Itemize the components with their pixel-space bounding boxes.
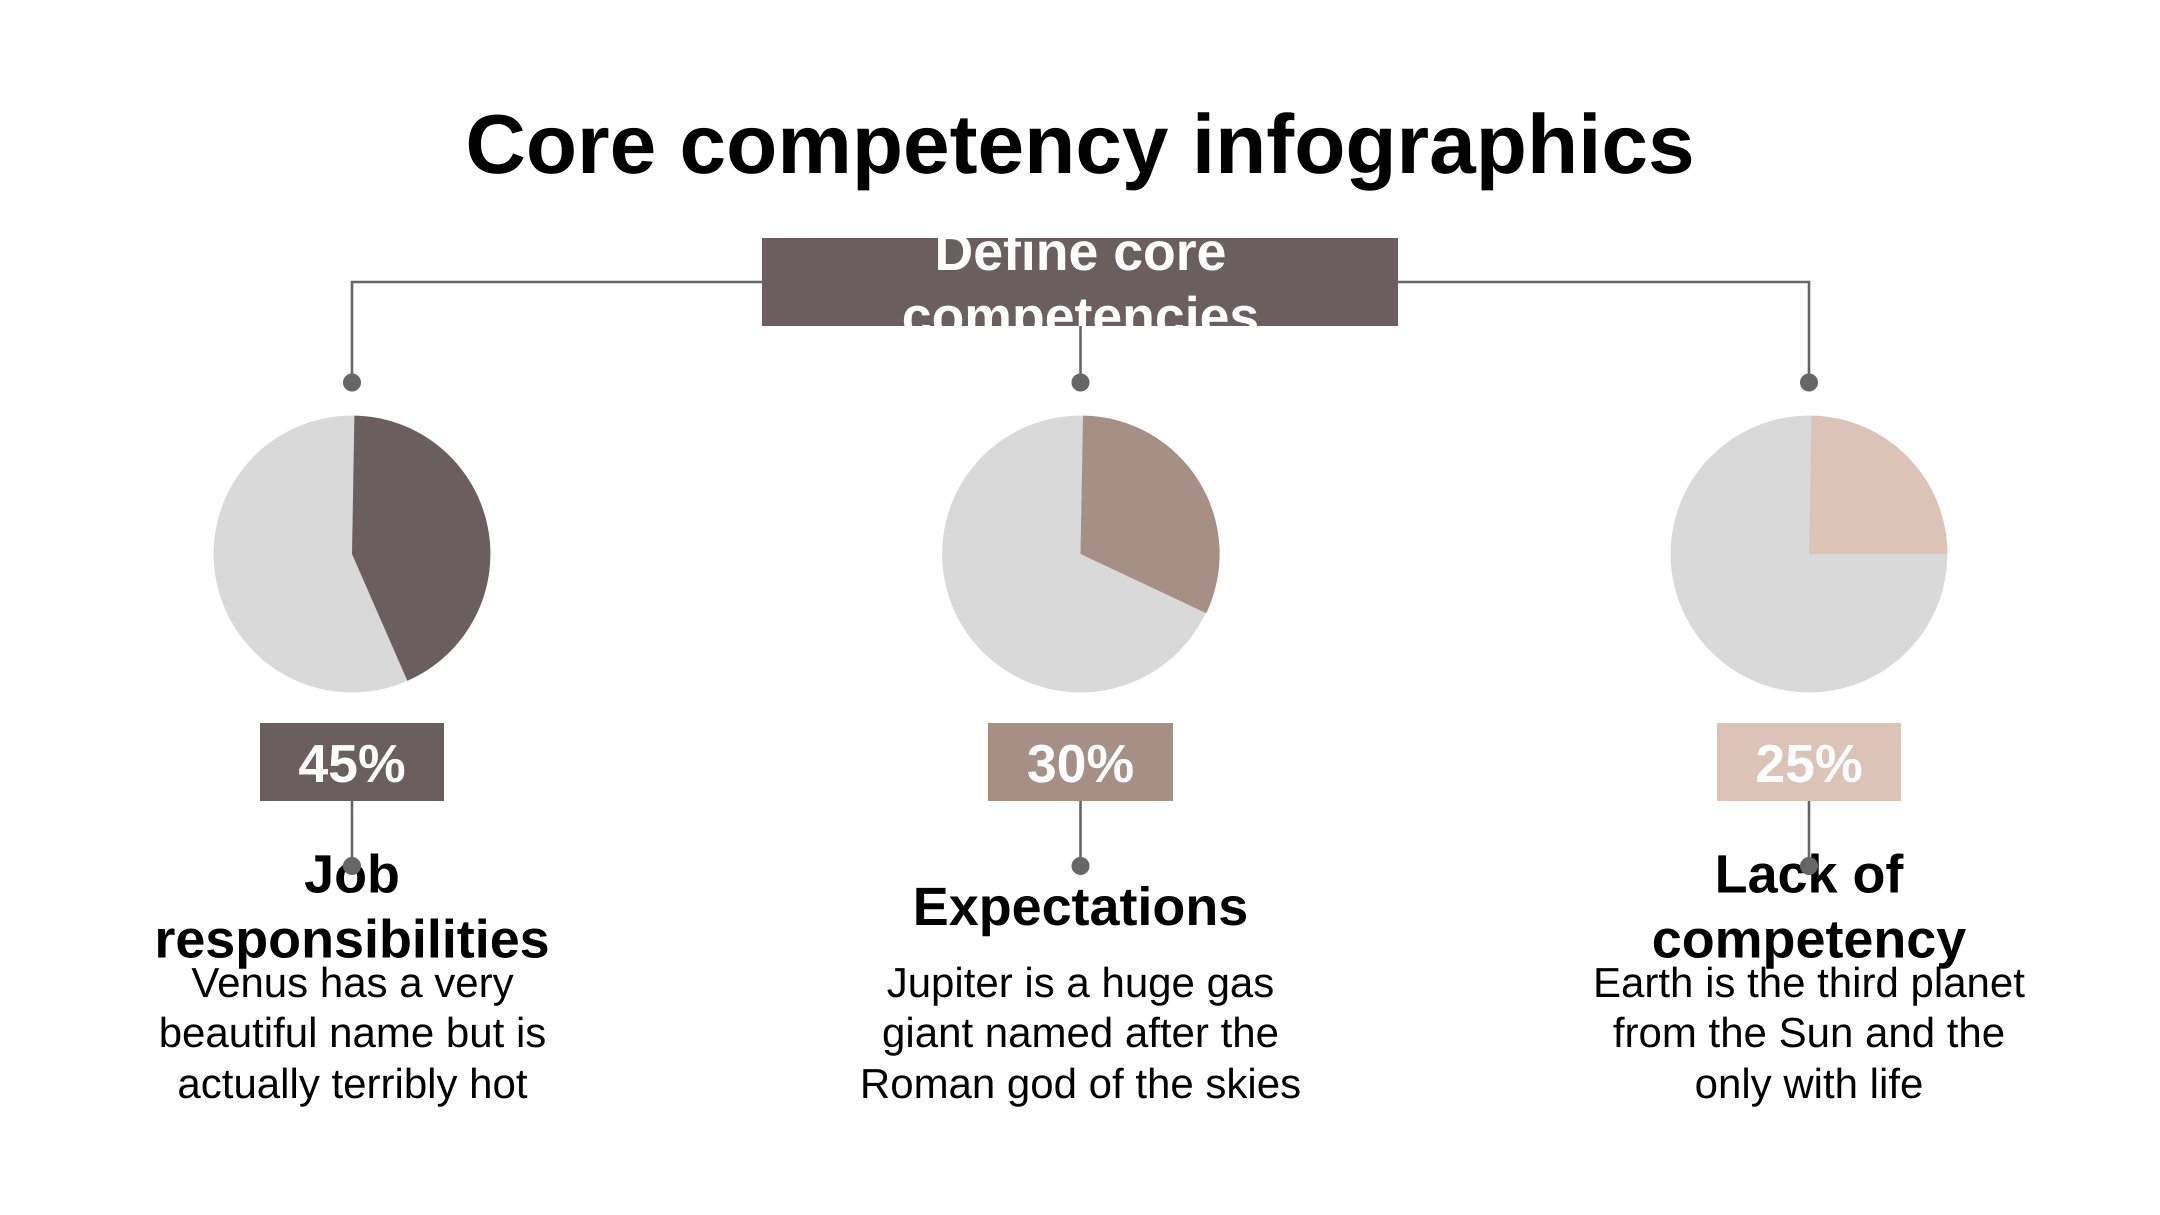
pie chart: 45% — [214, 416, 490, 692]
lower connector dots — [343, 857, 1818, 875]
percent badge 25%: 25% — [1755, 734, 1863, 794]
percent badge 30% — [988, 723, 1173, 801]
top connector dots — [343, 374, 1818, 392]
body text: venus — [159, 959, 546, 1107]
heading: lack of competency: competency — [1652, 910, 1966, 970]
central box: define core competencies: competencies — [902, 286, 1259, 346]
heading: lack of competency: Lack of — [1715, 844, 1904, 904]
percent badge 25% — [1717, 723, 1901, 801]
body text: venus: Venus has a very — [191, 959, 514, 1006]
body text: earth: from the Sun and the — [1613, 1009, 2005, 1056]
body text: earth: only with life — [1695, 1060, 1923, 1107]
body text: earth: Earth is the third planet — [1593, 959, 2025, 1006]
body text: jupiter: Roman god of the skies — [860, 1060, 1301, 1107]
pie chart: 30% — [942, 416, 1220, 692]
body text: earth — [1593, 959, 2025, 1107]
body text: venus: beautiful name but is — [159, 1009, 546, 1056]
lower connector lines — [352, 801, 1809, 866]
body text: jupiter — [860, 959, 1301, 1107]
connector lines from central box to top dots — [352, 282, 1809, 382]
heading: lack of competency — [1652, 844, 1966, 970]
heading: job responsibilities: Job — [304, 844, 400, 904]
body text: jupiter: Jupiter is a huge gas — [887, 959, 1274, 1006]
heading: job responsibilities: responsibilities — [154, 910, 550, 970]
heading: expectations: Expectations — [913, 877, 1248, 937]
percent badge 45% — [260, 723, 444, 801]
body text: venus: actually terribly hot — [177, 1060, 528, 1107]
central box: define core competencies — [762, 238, 1398, 326]
central box: define core competencies: Define core — [935, 222, 1226, 282]
body text: jupiter: giant named after the — [882, 1009, 1279, 1056]
pie chart: 25% — [1671, 416, 1947, 692]
title: Core competency infographics — [465, 97, 1695, 191]
heading: job responsibilities — [154, 844, 550, 970]
percent badge 30%: 30% — [1027, 734, 1134, 794]
percent badge 45%: 45% — [298, 734, 406, 794]
